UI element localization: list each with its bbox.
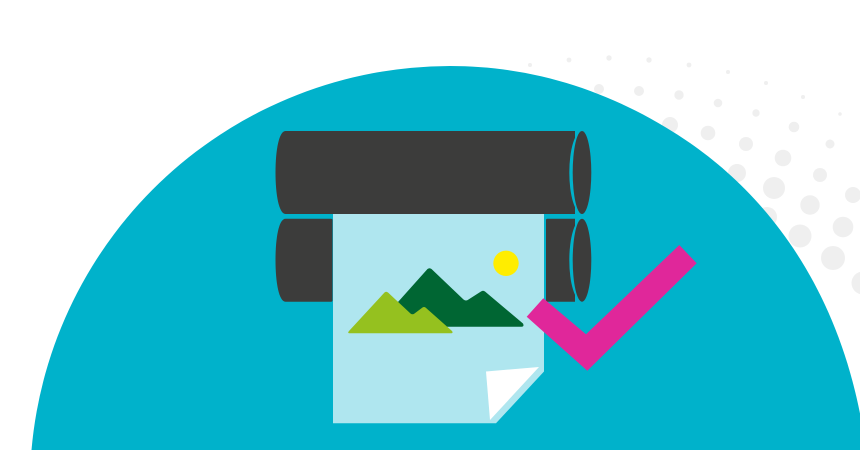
lower roller right body xyxy=(546,219,575,302)
icon: dark green mountains xyxy=(398,268,524,327)
upper roller end rim xyxy=(569,131,595,214)
lower roller left body xyxy=(276,219,332,302)
lower roller end xyxy=(573,219,591,302)
icon: light green mountains xyxy=(348,292,453,333)
upper roller end xyxy=(573,131,591,214)
sheet xyxy=(333,214,544,423)
icon: sun xyxy=(493,251,519,276)
folded corner xyxy=(486,367,539,420)
icon: magenta check mark xyxy=(527,245,697,371)
lower roller end rim xyxy=(569,219,595,302)
halftone dot pattern xyxy=(528,55,860,294)
printer rollers xyxy=(276,131,595,302)
paper sheet with folded corner xyxy=(333,214,544,423)
upper roller body xyxy=(276,131,575,214)
